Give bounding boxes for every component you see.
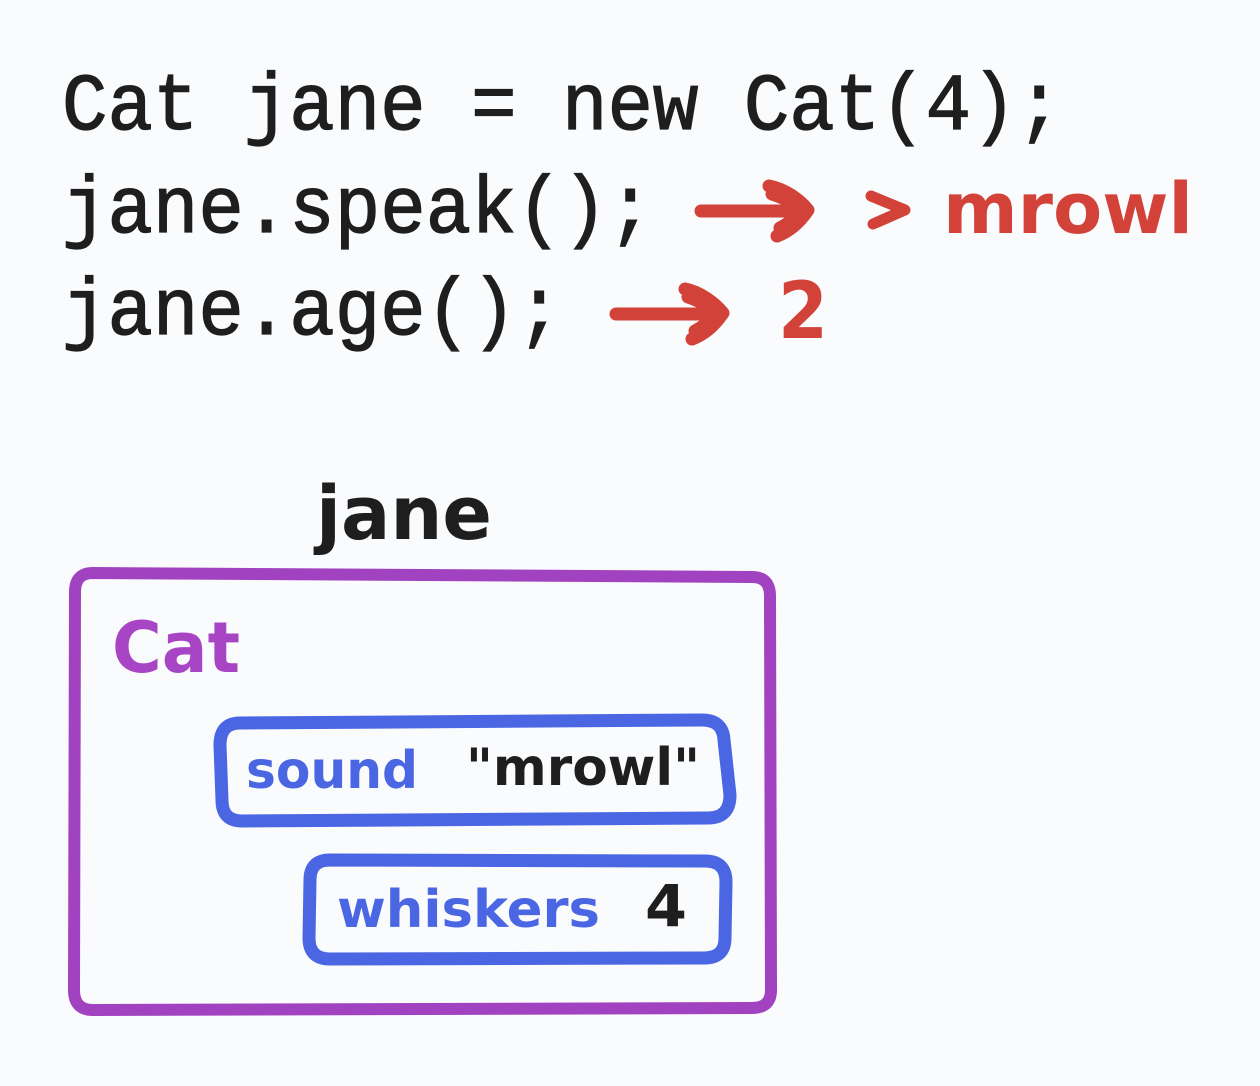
- label: Cat: Cat: [112, 607, 240, 689]
- field value: mrowl: "mrowl": [466, 738, 700, 798]
- output: 2: 2: [778, 267, 828, 357]
- label: jane: jane: [313, 471, 492, 557]
- field name: sound: sound: [246, 741, 418, 801]
- arrow: speak to output: [701, 186, 808, 236]
- code line: speak call: jane.speak();: [62, 166, 653, 257]
- arrow: age to output: [616, 289, 723, 339]
- code line: age call: jane.age();: [62, 268, 562, 359]
- field value: 4: 4: [645, 872, 687, 940]
- output: mrowl: mrowl: [943, 168, 1193, 250]
- field name: whiskers: whiskers: [337, 880, 600, 940]
- field box: whiskers: [309, 860, 726, 959]
- object box: Cat: [74, 573, 771, 1010]
- field box: sound: [220, 720, 730, 821]
- code line: constructor: Cat jane = new Cat(4);: [62, 63, 1062, 154]
